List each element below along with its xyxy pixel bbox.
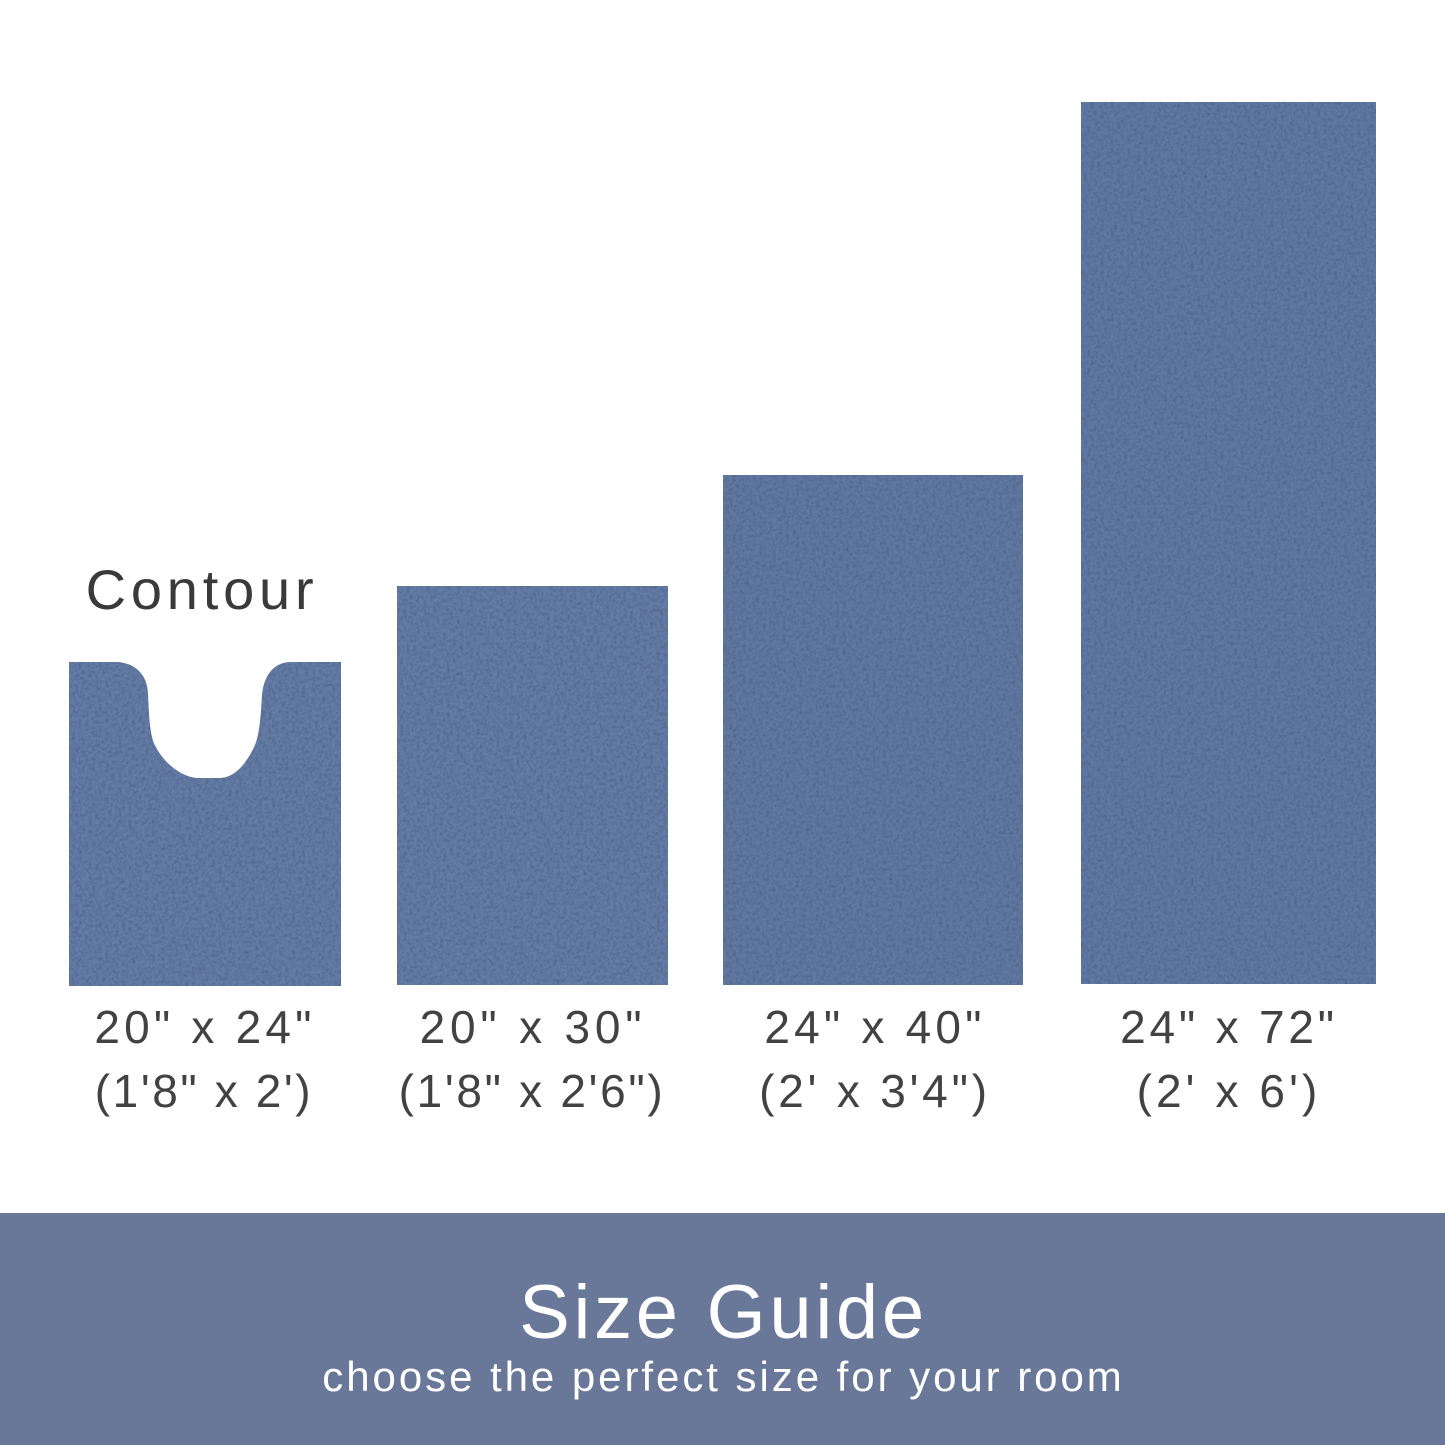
size label 24 x 72: 24" x 72" [1120,1001,1338,1053]
label: Contour: Contour [86,558,318,621]
footer banner [0,1213,1445,1445]
rug 24 x 40 [723,475,1023,985]
size label 20 x 24: (1'8" x 2') [95,1065,313,1117]
size label 24 x 72 [1120,1001,1338,1117]
size label 24 x 40: 24" x 40" [764,1001,986,1053]
size label 20 x 30: (1'8" x 2'6") [399,1065,665,1117]
size label 24 x 40 [759,1001,991,1117]
heading: Size Guide [519,1270,928,1355]
rug 20 x 30 [397,586,668,985]
contour rug [69,662,341,986]
rug 24 x 72 [1081,102,1376,984]
size label 20 x 30 [399,1001,665,1117]
size label 20 x 24 [94,1001,316,1117]
size label 20 x 30: 20" x 30" [420,1001,646,1053]
size label 24 x 72: (2' x 6') [1137,1065,1321,1117]
size label 20 x 24: 20" x 24" [94,1001,316,1053]
subheading: choose the perfect size for your room [322,1353,1125,1400]
size label 24 x 40: (2' x 3'4") [759,1065,991,1117]
